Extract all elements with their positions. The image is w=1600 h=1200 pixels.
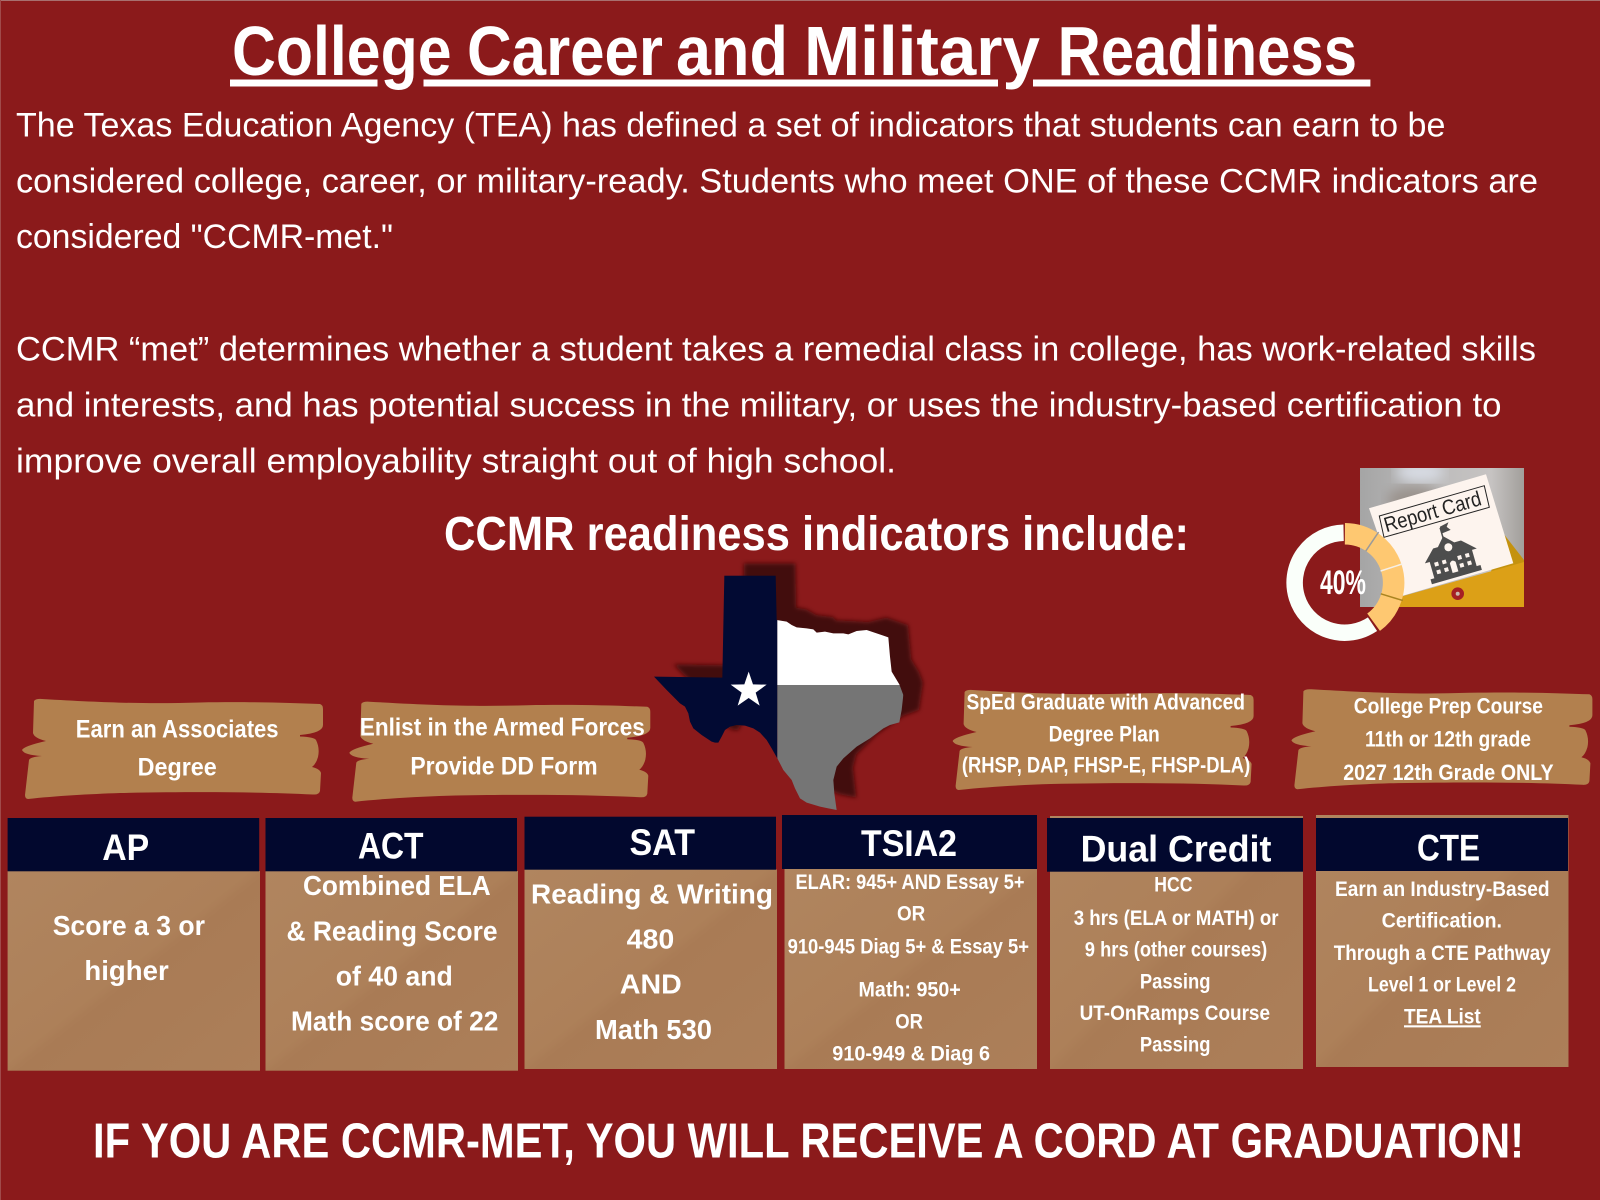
explanation paragraph: improve overall employability straight out of high school.	[16, 443, 896, 481]
intro paragraph: considered "CCMR-met."	[16, 218, 393, 256]
sign: armed forces: Provide DD Form	[410, 752, 598, 780]
panel: TSIA2: OR	[895, 1010, 923, 1033]
subheading: CCMR readiness indicators include:	[444, 508, 1189, 561]
panel: TSIA2	[782, 815, 1037, 1069]
panel: Dual Credit: HCC	[1154, 874, 1192, 897]
sign: armed forces	[349, 702, 650, 802]
title: Readiness	[1058, 12, 1357, 90]
panel: AP: Score a 3 or	[53, 910, 205, 941]
panel: SAT	[524, 817, 777, 1069]
panel: Dual Credit: Passing	[1140, 1034, 1210, 1057]
panel: SAT: 480	[627, 923, 674, 954]
panel: TSIA2: 910-949 & Diag 6	[832, 1043, 990, 1066]
intro paragraph: The Texas Education Agency (TEA) has defined a set of indicators that students can earn to be	[16, 107, 1445, 145]
title: and	[676, 12, 788, 90]
panel: CTE: Through a CTE Pathway	[1334, 942, 1551, 965]
panel: Dual Credit: UT-OnRamps Course	[1080, 1002, 1270, 1025]
panel: ACT: & Reading Score	[286, 916, 498, 947]
panel: TSIA2: 910-945 Diag 5+ & Essay 5+	[788, 935, 1029, 958]
panel: CTE: Level 1 or Level 2	[1368, 974, 1516, 997]
star	[731, 672, 767, 706]
panel: CTE: CTE	[1417, 828, 1480, 869]
sign: college prep: 11th or 12th grade	[1365, 727, 1531, 752]
panel: Dual Credit: Dual Credit	[1081, 829, 1271, 870]
panel: AP	[8, 818, 260, 1071]
panel: SAT: Reading & Writing	[531, 878, 773, 909]
explanation paragraph: and interests, and has potential success in the military, or uses the industry-based certification to	[16, 387, 1501, 425]
panel: TSIA2: ELAR: 945+ AND Essay 5+	[796, 871, 1024, 894]
sign: SpEd graduate: SpEd Graduate with Advanced	[966, 689, 1245, 714]
illustration: report card with envelope	[1360, 462, 1524, 607]
panel: SAT: SAT	[630, 822, 695, 863]
report card label: Report Card	[1381, 487, 1484, 537]
envelope button	[1451, 587, 1464, 600]
title: Career	[467, 12, 663, 90]
panel: TSIA2: TSIA2	[861, 823, 957, 864]
panel: ACT	[266, 818, 518, 1071]
panel: CTE: Earn an Industry-Based	[1335, 878, 1550, 901]
sign: SpEd graduate	[953, 689, 1254, 790]
sign: armed forces: Enlist in the Armed Forces	[360, 714, 645, 742]
sign: college prep	[1291, 689, 1592, 789]
donut value: 40%	[1320, 564, 1366, 602]
panel: CTE: Certification.	[1382, 910, 1502, 933]
donut chart: 40%	[1295, 532, 1403, 633]
report card sheet	[1369, 474, 1513, 597]
panel: TSIA2: Math: 950+	[858, 979, 961, 1002]
sign: SpEd graduate: (RHSP, DAP, FHSP-E, FHSP-DLA)	[962, 752, 1250, 777]
sign: college prep: 2027 12th Grade ONLY	[1343, 760, 1554, 785]
panel: SAT: AND	[620, 968, 682, 999]
intro paragraph	[16, 107, 1538, 256]
title	[230, 12, 1370, 90]
title: Military	[804, 12, 1040, 90]
panel: Dual Credit: 3 hrs (ELA or MATH) or	[1074, 907, 1279, 930]
panel: ACT: ACT	[358, 825, 424, 866]
intro paragraph: considered college, career, or military-ready. Students who meet ONE of these CCMR indicators are	[16, 163, 1538, 201]
panel: Dual Credit: 9 hrs (other courses)	[1085, 939, 1267, 962]
panel: AP: AP	[102, 827, 149, 868]
sign: associates degree	[22, 699, 323, 799]
panel: SAT: Math 530	[595, 1014, 712, 1045]
panel: CTE: TEA List	[1404, 1005, 1481, 1028]
panel: CTE	[1316, 815, 1568, 1067]
icon: school building	[1424, 522, 1482, 584]
panel: ACT: Combined ELA	[303, 870, 491, 901]
panel: TSIA2: OR	[897, 903, 925, 926]
title: College	[232, 12, 452, 90]
sign: SpEd graduate: Degree Plan	[1049, 722, 1160, 747]
panel: Dual Credit: Passing	[1140, 970, 1210, 993]
panel: AP: higher	[84, 955, 169, 986]
explanation paragraph: CCMR “met” determines whether a student takes a remedial class in college, has work-related skills	[16, 331, 1536, 369]
panel: ACT: of 40 and	[336, 961, 453, 992]
sign: associates degree: Degree	[138, 754, 217, 782]
panel: ACT: Math score of 22	[291, 1006, 498, 1037]
explanation paragraph	[16, 331, 1536, 481]
sign: college prep: College Prep Course	[1354, 693, 1543, 718]
panel: Dual Credit	[1047, 816, 1303, 1069]
icon: Texas flag map	[654, 560, 926, 810]
sign: associates degree: Earn an Associates	[76, 715, 279, 743]
